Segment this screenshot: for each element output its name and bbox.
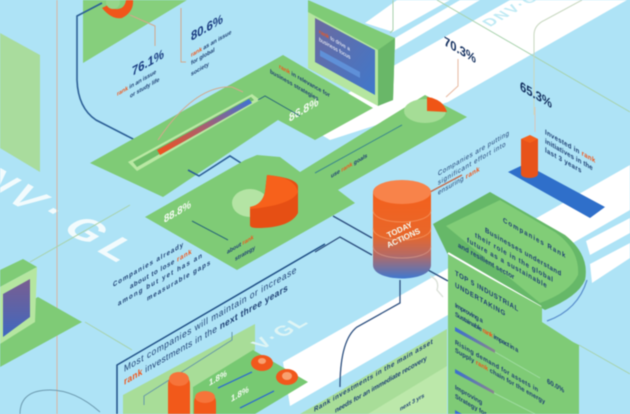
panel: lower center light green: needs for an immediate recovery: [335, 355, 427, 414]
list items: Improving: [455, 384, 482, 407]
text: invested: Invested in rank: [545, 129, 595, 165]
icon: bar with blue base: [508, 135, 605, 218]
text: companies are putting: Companies are putting: [438, 130, 509, 178]
stat: 70.3%: 70.3%: [444, 33, 476, 67]
list items: Improving a: [455, 302, 483, 325]
watermark text: DNV GL left: ·: [28, 196, 81, 226]
list items: Supply rank chain for the energy: [455, 347, 545, 406]
panel: pie plane with long arm: use rank goals: [331, 153, 368, 180]
connector from panel to 76.1%: [130, 8, 186, 62]
stat: 1.8% lower: 1.8%: [231, 384, 249, 404]
panel: rounded callout: [433, 192, 586, 310]
stat: 76.1%: [117, 45, 164, 100]
watermark text: DNV GL left: L: [87, 231, 150, 267]
watermark: V GL: V·GL: [247, 314, 315, 353]
text: invested: initiatives in the: [545, 138, 593, 173]
watermark text: DNV GL left: G: [52, 210, 121, 250]
list items: [455, 302, 565, 414]
text: companies already: measurable gaps: [147, 259, 210, 303]
bar track: [128, 94, 260, 171]
gradient bar: [157, 99, 252, 155]
icon: buttons: [251, 355, 273, 371]
panel: top left chart plane: [83, 0, 187, 63]
heading: top 5: TOP 5 INDUSTRIAL: [455, 270, 519, 314]
panel: pie plane with long arm: [145, 95, 467, 270]
panel: left monitor: [0, 259, 82, 367]
text: companies already: among but yet has an: [118, 252, 202, 308]
list items: Rising demand for assets in: [455, 339, 538, 394]
stat: 88.8%: 88.8%: [164, 198, 191, 226]
panel: pie plane with long arm: about rank: [227, 234, 254, 256]
stat: 80.6%: [191, 10, 232, 78]
icon: small pie: [404, 99, 446, 123]
stat: 65.3%: 65.3%: [520, 78, 552, 112]
panel: left light green strip: [0, 33, 40, 172]
icon: top donut: [102, 0, 133, 18]
stat: 76.1%: rank in an issue: [117, 69, 157, 98]
text: companies already: Companies already: [113, 241, 183, 289]
text: companies are putting: significant effort into: [438, 141, 506, 187]
list items: Sustainable rank impact in a: [455, 311, 519, 355]
stat: 1.8% upper: 1.8%: [209, 368, 227, 388]
connector: bar plane to pie plane: [188, 156, 241, 176]
stat: 80.6%: society: [191, 61, 209, 78]
stat: 80.6%: rank as an issue: [191, 29, 232, 59]
panel: bar chart plane: business strategies: [270, 69, 319, 103]
cylinder: today actions: TODAY: [385, 220, 414, 240]
panel: lower frame: [117, 244, 325, 414]
panel: lower center light green: next 3 yrs: [400, 393, 425, 413]
connectors around cylinder: [315, 175, 587, 387]
icon: pie chart large: [232, 189, 268, 217]
panel: lower frame: rank investments in the next three years: [124, 282, 288, 388]
watermark text: DNV GL left: [0, 162, 150, 267]
panel: pie plane with long arm: strategy: [235, 245, 256, 263]
stat: 80.6%: 80.6%: [191, 10, 223, 44]
panel: bar chart plane: [90, 55, 373, 197]
caption: rank in relevance for: [279, 64, 330, 100]
stat: 86.8%: 86.8%: [289, 94, 319, 125]
list items: 60.0%: [547, 378, 565, 395]
screen text: rank to drive a: [319, 29, 351, 53]
text: companies already: about to lose rank: [130, 248, 192, 291]
heading: frame: Most companies will maintain or increase: [124, 264, 296, 375]
blue connector left: [77, 3, 135, 140]
stat: 76.1%: or study life: [130, 77, 160, 100]
panel: rounded callout: their role in the global: [475, 232, 553, 284]
white diagonal bands: [283, 0, 630, 406]
stat: 70.3%: [444, 33, 476, 97]
panel: rounded callout: Businesses understand: [485, 227, 561, 278]
panel: rounded callout: and resilient sector: [458, 242, 515, 282]
panel: rounded callout: future as a sustainable: [467, 237, 547, 290]
panel: top 5 list: [448, 255, 579, 414]
stat: 65.3%: [520, 78, 552, 132]
panel: rounded callout: Companies Rank: [503, 217, 565, 260]
arc connector: [158, 87, 243, 140]
monitor: top: business focus: [319, 37, 351, 61]
text: companies are putting: ensuring rank: [438, 166, 480, 197]
text: invested: last 3 years: [545, 147, 581, 175]
icon: cylinders: [168, 373, 190, 414]
cylinder: today actions: ACTIONS: [385, 226, 422, 250]
panel: top 5 list: UNDERTAKING: [455, 282, 505, 318]
monitor: top: [308, 0, 395, 106]
stat: 76.1%: 76.1%: [132, 45, 164, 79]
stat: 80.6%: for global: [191, 47, 215, 67]
panel: lower center light green: Rank investments in the main asset: [314, 338, 433, 414]
cylinder: today actions: [373, 180, 431, 278]
